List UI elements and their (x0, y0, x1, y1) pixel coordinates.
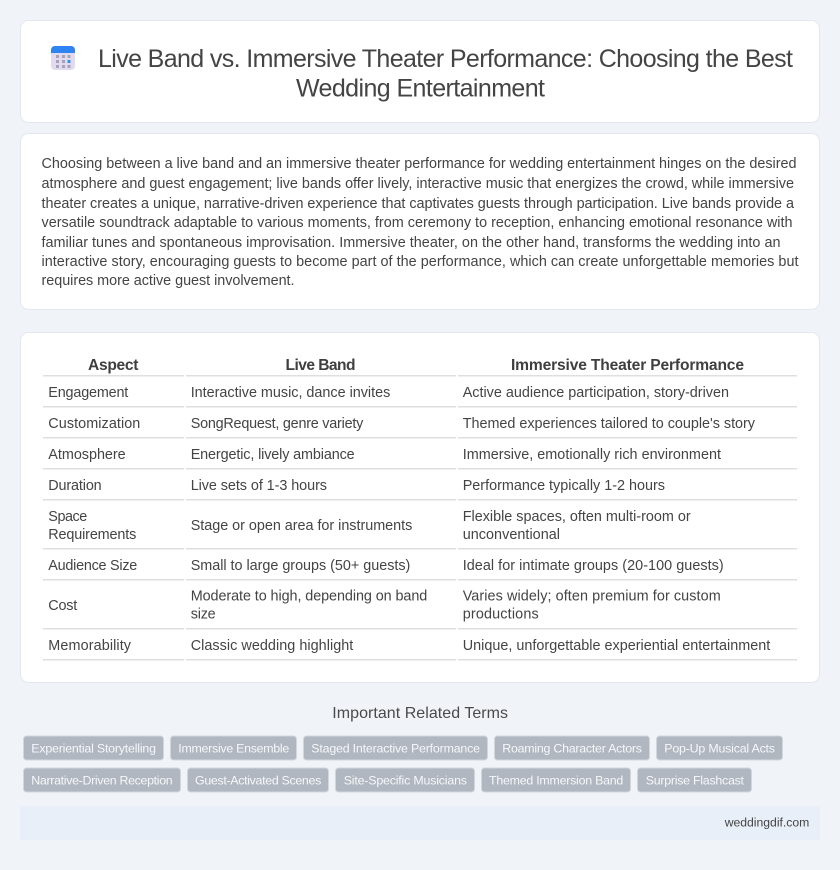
text block: introduction paragraph: Choosing between a live band and an immersive theater performance for wedding entertainment hinges on the desired (42, 156, 796, 172)
table row: Engagement: Engagement (48, 385, 128, 401)
table row: Atmosphere: Energetic, lively ambiance (191, 447, 355, 463)
table row: Cost: Moderate to high, depending on band (191, 588, 427, 604)
tag: Surprise Flashcast: Surprise Flashcast (646, 773, 745, 787)
table row: Atmosphere: Immersive, emotionally rich environment (463, 447, 721, 463)
heading: page title: Live Band vs. Immersive Theater Performance: Choosing the Best (98, 45, 793, 73)
text block: introduction paragraph: familiar tunes and spontaneous improvisation. Immersive theater, on the other hand, transforms the wedding into an (42, 235, 780, 251)
table row: Atmosphere (43, 447, 797, 470)
tag: Site-Specific Musicians: Site-Specific Musicians (344, 773, 467, 787)
table row: Duration: Duration (48, 478, 102, 494)
table row: Memorability (43, 638, 797, 660)
table row: Space Requirements: Stage or open area for instruments (191, 518, 412, 534)
table row: Cost: size (191, 606, 216, 622)
table row: Duration: Live sets of 1-3 hours (191, 478, 327, 494)
table row: Space Requirements: Space (48, 509, 87, 525)
table row: Engagement (43, 385, 797, 408)
tag: Staged Interactive Performance: Staged Interactive Performance (311, 741, 480, 755)
tag list: related terms (24, 736, 782, 792)
table header row (43, 357, 797, 376)
tag: Staged Interactive Performance (304, 736, 488, 760)
text block: introduction paragraph: requires more active guest involvement. (42, 273, 294, 289)
tag: Experiential Storytelling: Experiential Storytelling (31, 741, 156, 755)
tag: Themed Immersion Band: Themed Immersion Band (489, 773, 623, 787)
panel: introduction (20, 134, 820, 310)
table row: Customization: Customization (48, 416, 140, 432)
table row: Duration (43, 478, 797, 500)
tag: Pop-Up Musical Acts (656, 736, 782, 760)
tag: Site-Specific Musicians (336, 768, 474, 792)
table row: Memorability: Unique, unforgettable experiential entertainment (463, 638, 770, 654)
table row: Audience Size: Ideal for intimate groups (20-100 guests) (463, 558, 724, 574)
tag: Narrative-Driven Reception: Narrative-Driven Reception (31, 773, 173, 787)
table row: Engagement: Interactive music, dance invites (191, 385, 390, 401)
footer bar (20, 806, 820, 840)
panel: comparison table (20, 332, 820, 682)
table row: Memorability: Classic wedding highlight (191, 638, 353, 654)
table header row: Immersive Theater Performance (511, 357, 744, 374)
table row: Customization (43, 416, 797, 438)
table row: Space Requirements: Flexible spaces, often multi-room or (463, 509, 691, 525)
icon: calendar (51, 46, 75, 70)
table row: Customization: Themed experiences tailored to couple's story (463, 416, 756, 432)
text block: introduction paragraph: interactive story, encouraging guests to become part of the performance, which can create unforgettable memories but (42, 254, 798, 270)
heading: important related terms: Important Related Terms (332, 705, 508, 722)
table row: Space Requirements: Requirements (48, 527, 136, 543)
table row: Space Requirements (43, 509, 797, 550)
tag: Pop-Up Musical Acts: Pop-Up Musical Acts (664, 741, 775, 755)
table row: Audience Size: Small to large groups (50+ guests) (191, 558, 410, 574)
table row: Duration: Performance typically 1-2 hours (463, 478, 665, 494)
tag: Experiential Storytelling (24, 736, 164, 760)
table header row: Live Band (286, 357, 356, 374)
tag: Immersive Ensemble (170, 736, 296, 760)
text block: introduction paragraph: theater creates a unique, narrative-driven experience that captivates guests through participation. Live bands provide a (42, 196, 794, 212)
table row: Space Requirements: unconventional (463, 527, 560, 543)
table row: Cost: productions (463, 606, 539, 622)
heading: page title (98, 45, 793, 102)
table header row: Aspect (88, 357, 138, 374)
text block: introduction paragraph: atmosphere and guest engagement; live bands offer lively, interactive music that energizes the crowd, while immersive (42, 176, 794, 192)
table row: Cost: Cost (48, 598, 77, 614)
tag: Themed Immersion Band (482, 768, 630, 792)
tag: Guest-Activated Scenes: Guest-Activated Scenes (195, 773, 321, 787)
table row: Audience Size (43, 558, 797, 580)
tag: Roaming Character Actors (494, 736, 650, 760)
table row: Atmosphere: Atmosphere (48, 447, 126, 463)
table row: Engagement: Active audience participation, story-driven (463, 385, 729, 401)
tag: Surprise Flashcast (638, 768, 752, 792)
tag: Immersive Ensemble: Immersive Ensemble (178, 741, 289, 755)
heading: page title: Wedding Entertainment (296, 74, 545, 102)
table row: Cost (43, 588, 797, 630)
table row: Cost: Varies widely; often premium for custom (463, 588, 721, 604)
tag: Narrative-Driven Reception (24, 768, 180, 792)
text block: introduction paragraph: versatile soundtrack adaptable to various moments, from ceremony to reception, enhancing emotional resonance with (42, 215, 792, 231)
text block: introduction paragraph (42, 156, 798, 289)
tag: Roaming Character Actors: Roaming Character Actors (502, 741, 642, 755)
table row: Memorability: Memorability (48, 638, 132, 654)
table row: Audience Size: Audience Size (48, 558, 137, 574)
table row: Customization: SongRequest, genre variety (191, 416, 364, 432)
tag: Guest-Activated Scenes (188, 768, 328, 792)
footer text: source: weddingdif.com (724, 816, 809, 830)
panel: title card (20, 20, 820, 122)
